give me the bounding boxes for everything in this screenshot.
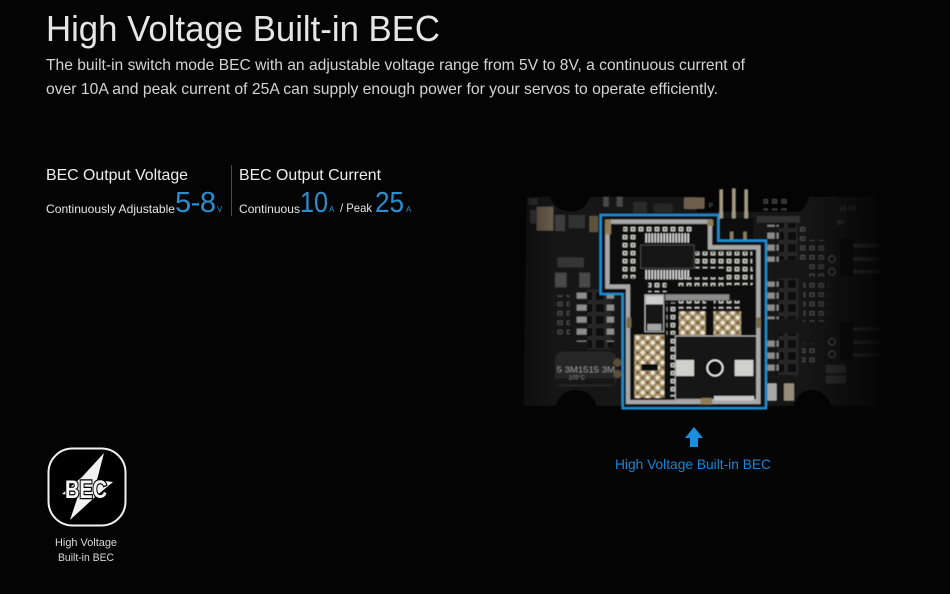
small components (623, 226, 693, 233)
capacitor (555, 352, 621, 387)
description text (46, 57, 746, 98)
board body (523, 197, 877, 406)
spec: BEC output voltage: V (217, 205, 223, 214)
title: High Voltage Built-in BEC (46, 8, 440, 49)
spec: BEC output current: A (406, 205, 412, 214)
spec: BEC output voltage: BEC Output Voltage (46, 167, 188, 184)
left side components: P (709, 202, 714, 209)
arrow pointing to BEC zone (685, 427, 703, 447)
description text: over 10A and peak current of 25A can supply enough power for your servos to operate efficiently. (46, 81, 718, 98)
spec: BEC output voltage: Continuously Adjustable (46, 202, 175, 216)
right side components (757, 197, 880, 401)
pin header (719, 188, 753, 240)
right side components: 16 08 (838, 204, 857, 213)
icon: BEC lightning badge (48, 448, 126, 526)
board edge fade (520, 187, 883, 410)
circuit board (520, 187, 883, 410)
spec divider (231, 165, 232, 216)
spec: BEC output current: 10 (300, 187, 328, 219)
spec: BEC output current: Continuous (239, 202, 300, 216)
capacitor: 5 3M1515 3M (557, 365, 615, 375)
spec: BEC output current: BEC Output Current (239, 167, 382, 184)
description text: The built-in switch mode BEC with an adjustable voltage range from 5V to 8V, a continuous current of (46, 57, 746, 74)
left side components (528, 197, 714, 349)
right side components: 90 (837, 220, 844, 227)
icon caption: Built-in BEC (58, 552, 114, 564)
spec: BEC output current (239, 167, 412, 219)
spec: BEC output voltage (46, 167, 223, 219)
icon: BEC lightning badge: BEC (65, 476, 107, 504)
inductor block (675, 336, 757, 399)
solder pads (679, 301, 706, 309)
spec: BEC output current: 25 (375, 187, 404, 219)
spec: BEC output voltage: 5-8 (175, 187, 216, 219)
capacitor: 105°C (568, 375, 586, 381)
icon caption: High Voltage (55, 537, 117, 549)
icon caption (55, 537, 117, 564)
BEC highlighted zone (601, 215, 766, 408)
spec: BEC output current: / Peak (340, 201, 373, 215)
regulator (645, 295, 664, 332)
BEC zone caption: High Voltage Built-in BEC (615, 456, 771, 472)
controller chip (641, 245, 694, 268)
spec: BEC output current: A (329, 205, 335, 214)
